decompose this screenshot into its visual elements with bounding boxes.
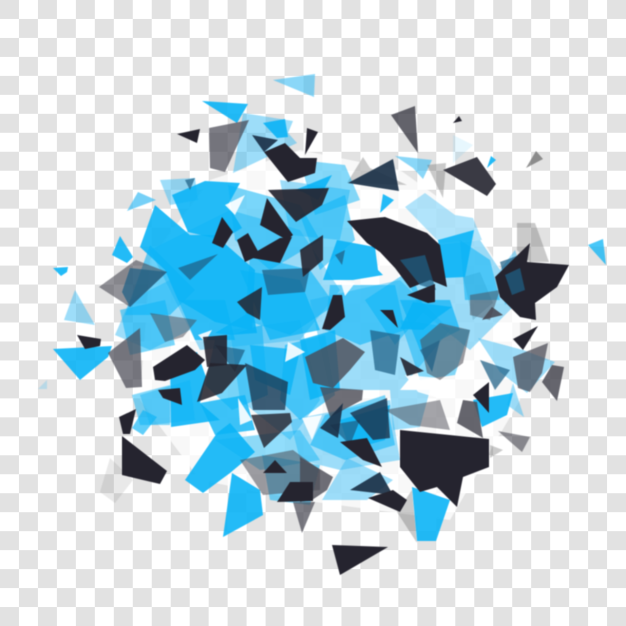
dark shards bbox=[77, 116, 569, 575]
mid blue filling shards bbox=[120, 160, 500, 505]
white gaps between shards bbox=[198, 195, 440, 440]
shard cluster bbox=[38, 74, 606, 575]
grey translucent shards bbox=[99, 106, 564, 533]
faint shards: light blue and ghost grey bbox=[38, 74, 555, 543]
white backing blob behind shards bbox=[140, 150, 520, 520]
bright blue shards bbox=[53, 101, 606, 541]
